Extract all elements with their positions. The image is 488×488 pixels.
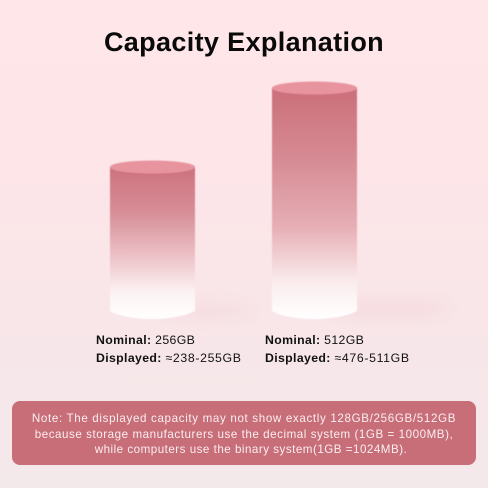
shadow: large cylinder: [328, 302, 452, 316]
title: Capacity Explanation: [104, 27, 384, 57]
label: 512GB capacity: Nominal: 512GB: [265, 333, 364, 347]
label: 512GB capacity: Displayed: ≈476-511GB: [265, 351, 410, 365]
cylinder: 256GB: [110, 160, 195, 319]
label: 512GB capacity: [265, 333, 410, 365]
chart: capacity cylinders: [109, 81, 412, 319]
label: 256GB capacity: Displayed: ≈238-255GB: [96, 351, 242, 365]
label: 256GB capacity: Nominal: 256GB: [96, 333, 195, 347]
note text: Note: The displayed capacity may not show exactly 128GB/256GB/512GB: [32, 412, 456, 425]
label: 256GB capacity: [96, 333, 242, 365]
note text: [32, 412, 456, 456]
note text: while computers use the binary system(1GB =1024MB).: [95, 443, 407, 456]
cylinder: 512GB: [272, 82, 357, 319]
note text: because storage manufacturers use the decimal system (1GB = 1000MB),: [35, 428, 453, 440]
callout: note: [12, 401, 476, 465]
shadow: small cylinder: [157, 306, 253, 316]
